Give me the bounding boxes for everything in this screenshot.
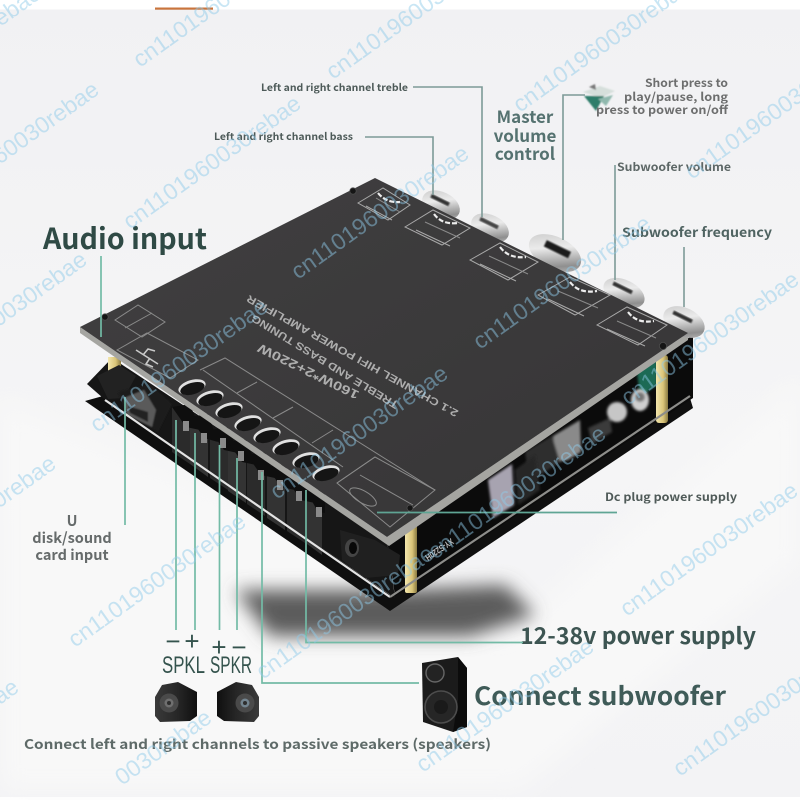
line: audio input — [100, 256, 102, 337]
right speaker polarity and name: − — [231, 632, 247, 662]
knob: subwoofer frequency — [658, 300, 710, 344]
label: short press instructions — [596, 75, 729, 118]
knob markings — [358, 188, 667, 346]
control knobs — [417, 185, 710, 344]
left speaker polarity and name: − — [165, 626, 181, 656]
label: U disk/sound card input: card input — [35, 544, 109, 565]
line: power supply — [306, 490, 523, 642]
line: SPKR plus — [218, 445, 220, 630]
line: SPKR minus — [236, 458, 238, 630]
watermarks: cn1101960030rebae — [286, 140, 473, 284]
icon: left speaker — [155, 682, 197, 722]
knob: subwoofer volume — [599, 272, 649, 314]
line: SPKL plus — [194, 433, 196, 630]
label: master volume control: Master — [497, 103, 554, 128]
plate front markings — [115, 305, 435, 527]
audio jack — [97, 365, 136, 399]
plate title text: TREBLE AND BASS TUNING — [249, 312, 401, 411]
label: U disk/sound card input: U — [67, 510, 77, 531]
label: master volume control — [494, 103, 556, 165]
plate title text — [244, 292, 460, 419]
front gold post — [405, 523, 417, 593]
knob: treble — [466, 208, 514, 248]
heading: audio input: Audio input — [42, 216, 207, 258]
label: short press instructions: play/pause, long — [624, 89, 728, 105]
label: left and right channel treble: Left and right channel treble — [261, 79, 408, 94]
watermarks: 0030rebae — [110, 704, 216, 790]
line: subwoofer connection — [262, 472, 419, 683]
watermarks: cn1101960030rebae — [616, 266, 800, 410]
label: master volume control: control — [495, 140, 555, 165]
interior electronics, right side — [387, 335, 693, 596]
watermarks: cn1101960030rebae — [468, 210, 655, 354]
right speaker polarity and name: SPKR — [210, 652, 252, 679]
lower board silver edge, left — [105, 400, 390, 597]
icon: power button — [583, 84, 615, 111]
inductor — [488, 455, 540, 518]
USB symbol — [136, 349, 158, 367]
amplifier board — [80, 178, 710, 611]
board model text: XY-S220H — [423, 536, 455, 563]
line: bass — [365, 137, 433, 195]
callout lines: inputs and outputs — [101, 256, 617, 683]
speaker output slots — [177, 376, 341, 484]
plate title text: 160W*2+220W — [255, 341, 361, 402]
watermarks: cn1101960030rebae — [411, 633, 598, 777]
label: dc plug power supply: Dc plug power supply — [605, 489, 738, 505]
watermarks: cn1101960030rebae — [615, 477, 800, 621]
watermarks: cn1101960030rebae — [423, 420, 610, 564]
board screws — [102, 188, 667, 511]
board shadow — [235, 585, 535, 636]
speaker terminals — [172, 404, 325, 555]
green capacitor — [637, 358, 657, 397]
label: U disk/sound card input: disk/sound — [32, 527, 112, 548]
silver capacitors — [588, 389, 649, 444]
plate edge — [80, 327, 688, 546]
line: SPKL minus — [175, 420, 177, 630]
right gold post — [656, 355, 668, 423]
top plate — [80, 178, 688, 537]
watermarks: cn1101960030rebae — [85, 293, 272, 437]
watermarks: cn1101960030rebae — [63, 508, 250, 652]
label: short press instructions: Short press to — [645, 75, 728, 91]
icon: subwoofer cabinet — [422, 657, 467, 732]
callout lines: top controls — [365, 87, 684, 307]
line: treble — [413, 87, 482, 217]
label: subwoofer frequency: Subwoofer frequency — [622, 222, 773, 241]
label: U disk/sound card input — [32, 510, 112, 565]
label: left and right channel bass: Left and right channel bass — [214, 128, 353, 143]
heading: 12-38v power supply: 12-38v power supply — [520, 617, 756, 651]
large capacitor — [525, 420, 581, 482]
lower board silver edge, right — [390, 396, 690, 597]
right speaker polarity and name — [210, 632, 252, 679]
right speaker polarity and name: + — [211, 632, 227, 662]
USB port — [118, 384, 172, 432]
line: master volume — [563, 95, 585, 240]
line: dc plug — [377, 512, 617, 514]
back gold post — [108, 357, 121, 371]
watermarks: cn1101960030rebae — [265, 360, 452, 504]
interior electronics, left side — [87, 358, 395, 598]
watermarks: cn1101960030rebae — [118, 90, 305, 234]
label: short press instructions: press to power on/off — [596, 102, 729, 118]
left speaker polarity and name — [162, 626, 205, 679]
line: subwoofer volume — [614, 165, 616, 280]
left speaker polarity and name: SPKL — [162, 652, 205, 679]
label: master volume control: volume — [494, 122, 556, 147]
left speaker polarity and name: + — [184, 626, 200, 656]
DC power jack — [340, 530, 400, 578]
knob: master volume — [523, 226, 587, 280]
watermarks: cn1101960030rebae — [251, 540, 438, 684]
lower circuit board — [85, 396, 693, 611]
line: subwoofer frequency — [683, 247, 685, 307]
caption: passive speakers: Connect left and right channels to passive speakers (speakers) — [24, 733, 491, 753]
knob: bass — [417, 185, 465, 225]
icon: right speaker — [217, 682, 259, 722]
line: U disk input — [124, 397, 126, 525]
heading: connect subwoofer: Connect subwoofer — [474, 677, 726, 713]
label: subwoofer volume: Subwoofer volume — [617, 159, 731, 175]
plate title text: 2.1 CHANNEL HIFI POWER AMPLIFIER — [244, 292, 460, 419]
